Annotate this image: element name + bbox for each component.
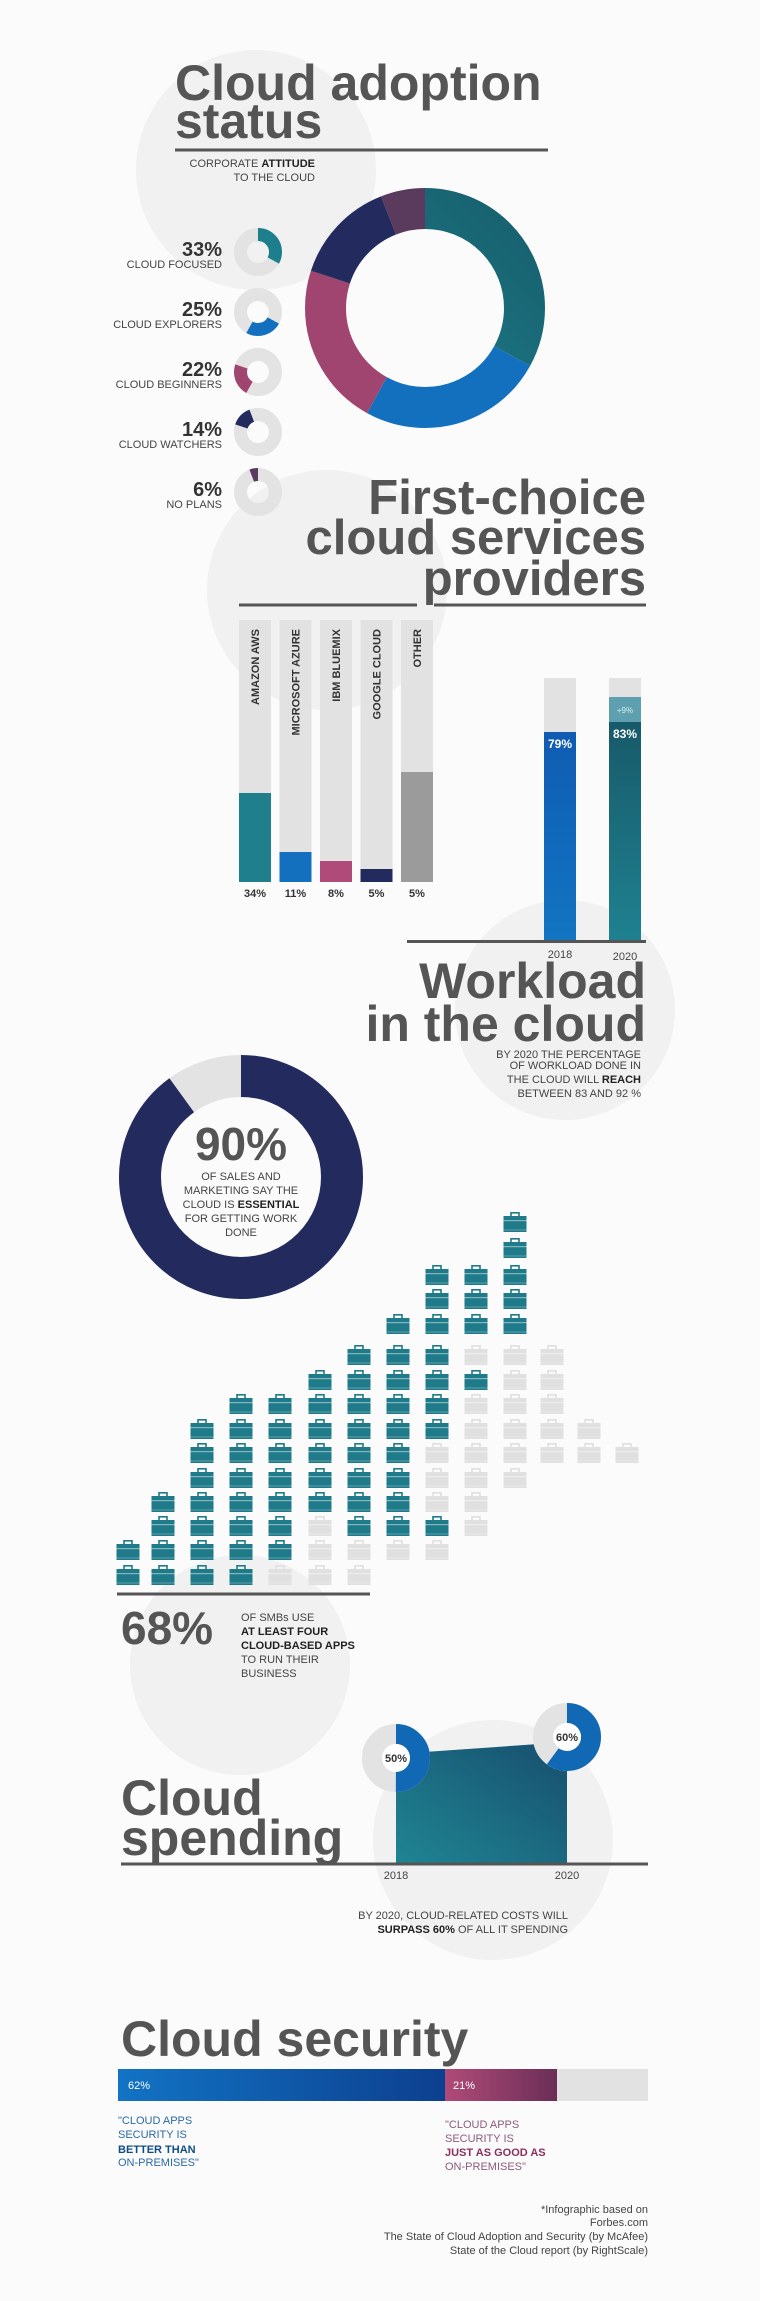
legend: small donuts: CLOUD FOCUSED: [127, 259, 222, 271]
footnote: sources: State of the Cloud report (by RightScale): [450, 2245, 648, 2257]
stat: 68% SMBs: TO RUN THEIR: [241, 1654, 319, 1666]
title: cloud spending: Cloud: [121, 1770, 263, 1826]
text: workload description: BY 2020 THE PERCENTAGE: [496, 1049, 641, 1061]
donut: 90% sales and marketing: CLOUD IS ESSENTIAL: [183, 1199, 300, 1211]
bar chart: workload: 2018: [548, 949, 572, 961]
bar chart: workload: 2020: [613, 951, 637, 963]
title: first-choice providers: cloud services: [306, 511, 646, 565]
quote: just as good as: "CLOUD APPS: [445, 2119, 519, 2131]
quote: better than on-premises: "CLOUD APPS: [118, 2115, 192, 2127]
bar: security: 62%: [128, 2080, 150, 2092]
donut: 90% sales and marketing: DONE: [225, 1227, 257, 1239]
footnote: sources: The State of Cloud Adoption and Security (by McAfee): [384, 2231, 648, 2243]
icon grid: briefcases: [116, 1213, 638, 1585]
quote: just as good as: JUST AS GOOD AS: [445, 2147, 546, 2159]
chart: cloud spending area: 2020: [555, 1870, 579, 1882]
stat: 68% SMBs: 68%: [121, 1602, 213, 1654]
footnote: sources: *Infographic based on: [541, 2204, 648, 2216]
subtitle: corporate attitude: TO THE CLOUD: [234, 172, 315, 184]
donut: 90% sales and marketing: [140, 1076, 342, 1278]
bar chart: providers: 11%: [285, 888, 306, 900]
title: workload in the cloud: Workload: [419, 953, 646, 1009]
big donut: adoption: [326, 208, 524, 408]
title: cloud adoption status: [175, 55, 542, 149]
text: workload description: THE CLOUD WILL REACH: [507, 1074, 641, 1086]
legend: small donuts: NO PLANS: [166, 499, 222, 511]
legend: small donuts: CLOUD BEGINNERS: [116, 379, 222, 391]
donut: 90% sales and marketing: MARKETING SAY THE: [184, 1185, 298, 1197]
chart: cloud spending area: 2018: [384, 1870, 408, 1882]
footnote: sources: [384, 2204, 648, 2257]
background circles: [130, 50, 675, 1960]
donut: 90% sales and marketing: OF SALES AND: [201, 1171, 281, 1183]
bar: security: [118, 2069, 648, 2101]
text: spending description: BY 2020, CLOUD-RELATED COSTS WILL: [358, 1910, 568, 1922]
stat: 68% SMBs: [121, 1602, 355, 1680]
subtitle: corporate attitude: CORPORATE ATTITUDE: [190, 158, 315, 170]
bar chart: workload: +9%: [617, 706, 633, 715]
title: cloud spending: [121, 1770, 343, 1866]
legend: small donuts: CLOUD WATCHERS: [119, 439, 222, 451]
text: workload description: OF WORKLOAD DONE IN: [510, 1060, 641, 1072]
chart: cloud spending area: [121, 1713, 648, 1882]
bar chart: providers: [239, 620, 433, 900]
donut: 90% sales and marketing: 90%: [195, 1118, 287, 1170]
stat: 68% SMBs: OF SMBs USE: [241, 1612, 314, 1624]
subtitle: corporate attitude: [190, 158, 315, 184]
title: cloud spending: spending: [121, 1810, 343, 1866]
legend: small donuts: 6%: [193, 479, 222, 501]
legend: small donuts: 33%: [182, 239, 222, 261]
quote: better than on-premises: SECURITY IS: [118, 2129, 187, 2141]
chart: cloud spending area: 60%: [556, 1732, 578, 1744]
quote: just as good as: SECURITY IS: [445, 2133, 514, 2145]
bar chart: providers: 5%: [409, 888, 425, 900]
quote: better than on-premises: BETTER THAN: [118, 2144, 196, 2156]
footnote: sources: Forbes.com: [590, 2217, 648, 2229]
legend: small donuts: CLOUD EXPLORERS: [113, 319, 222, 331]
quote: better than on-premises: ON-PREMISES": [118, 2157, 199, 2169]
legend: small donuts: [113, 234, 276, 511]
title: workload in the cloud: in the cloud: [365, 996, 646, 1052]
bar chart: workload: 83%: [613, 727, 637, 741]
bar chart: providers: 8%: [328, 888, 344, 900]
bar chart: providers: IBM BLUEMIX: [331, 628, 343, 702]
quote: just as good as: ON-PREMISES": [445, 2161, 526, 2173]
text: spending description: [358, 1910, 568, 1936]
bar chart: workload: 79%: [548, 737, 572, 751]
legend: small donuts: 22%: [182, 359, 222, 381]
bar chart: providers: MICROSOFT AZURE: [290, 629, 302, 736]
title: first-choice providers: First-choice: [368, 471, 646, 525]
title: first-choice providers: providers: [423, 552, 646, 606]
chart: cloud spending area: 50%: [385, 1753, 407, 1765]
stat: 68% SMBs: CLOUD-BASED APPS: [241, 1640, 355, 1652]
title: first-choice providers: [306, 471, 646, 606]
title: cloud security: Cloud security: [121, 2011, 468, 2067]
text: spending description: SURPASS 60% OF ALL IT SPENDING: [377, 1924, 568, 1936]
legend: small donuts: 25%: [182, 299, 222, 321]
text: workload description: BETWEEN 83 AND 92 %: [518, 1088, 641, 1100]
bar chart: providers: GOOGLE CLOUD: [372, 629, 384, 719]
bar chart: providers: OTHER: [412, 629, 424, 668]
bar chart: providers: 5%: [369, 888, 385, 900]
text: workload description: [496, 1049, 641, 1100]
bar chart: workload: [407, 678, 646, 963]
stat: 68% SMBs: BUSINESS: [241, 1668, 297, 1680]
legend: small donuts: 14%: [182, 419, 222, 441]
stat: 68% SMBs: AT LEAST FOUR: [241, 1626, 328, 1638]
title: cloud adoption status: status: [175, 93, 322, 149]
bar chart: providers: 34%: [244, 888, 266, 900]
bar: security: 21%: [453, 2080, 475, 2092]
quote: better than on-premises: [118, 2115, 199, 2169]
title: cloud adoption status: Cloud adoption: [175, 55, 542, 111]
bar chart: providers: AMAZON AWS: [250, 629, 262, 705]
donut: 90% sales and marketing: FOR GETTING WORK: [185, 1213, 298, 1225]
quote: just as good as: [445, 2119, 546, 2173]
title: workload in the cloud: [365, 953, 646, 1052]
